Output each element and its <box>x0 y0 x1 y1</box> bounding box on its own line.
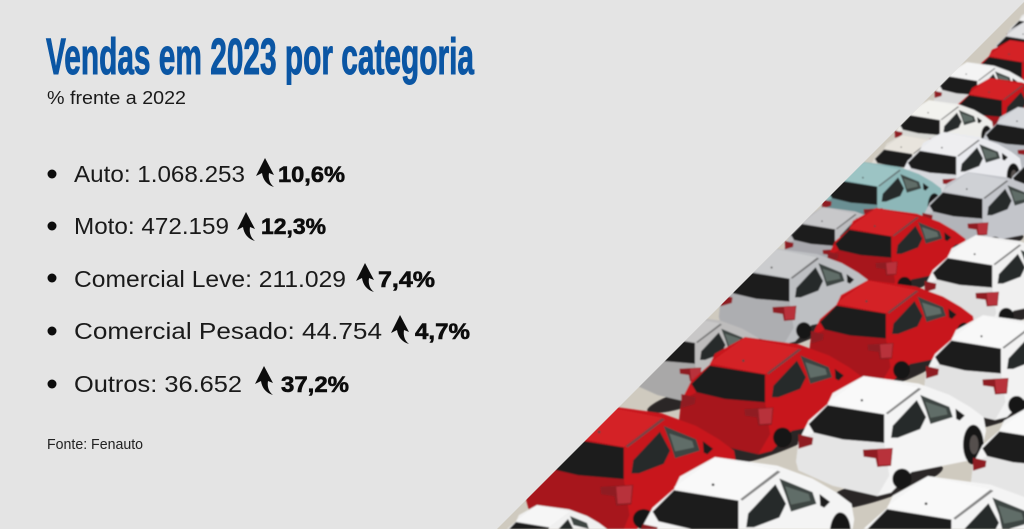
item: Auto: Auto: 1.068.253 <box>74 161 245 187</box>
item: Comercial Leve: Comercial Leve: 211.029 <box>74 266 346 292</box>
item: Moto <box>48 212 326 241</box>
item: Auto: 10,6% <box>278 162 345 187</box>
title: Vendas em 2023 por categoria <box>46 28 474 85</box>
item: Outros <box>48 366 349 397</box>
item: Comercial Pesado: Comercial Pesado: 44.754 <box>74 318 382 344</box>
item: Comercial Leve <box>48 263 435 292</box>
item: Comercial Leve: 7,4% <box>378 267 435 292</box>
list: sales by category <box>48 158 470 397</box>
item: Outros: Outros: 36.652 <box>74 371 242 397</box>
subtitle: % frente a 2022 <box>47 88 186 108</box>
panel: photo of parked cars <box>490 0 1024 529</box>
source note: Fonte: Fenauto <box>47 437 143 453</box>
item: Outros: 37,2% <box>281 372 349 397</box>
item: Auto <box>48 158 345 187</box>
item: Comercial Pesado: 4,7% <box>415 319 470 344</box>
item: Moto: 12,3% <box>261 214 326 239</box>
item: Comercial Pesado <box>48 315 470 344</box>
item: Moto: Moto: 472.159 <box>74 213 229 239</box>
